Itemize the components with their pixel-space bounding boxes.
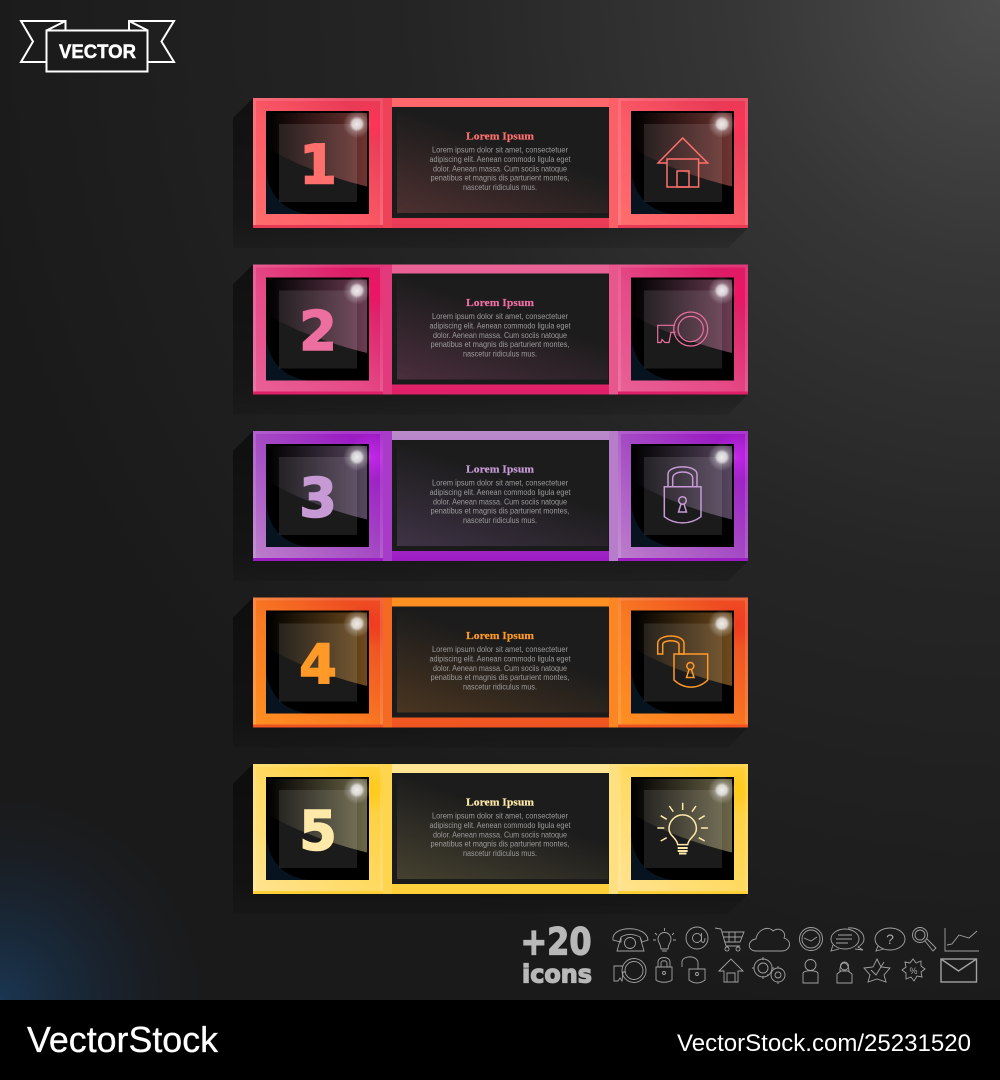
icon: discount badge <box>902 959 925 981</box>
number cell 5: 5 <box>299 800 337 862</box>
number cell 4: 4 <box>299 633 337 696</box>
text panel 5: Lorem Ipsum <box>466 796 534 808</box>
icon: question bubble <box>875 928 905 951</box>
text panel 4 <box>383 598 618 728</box>
number cell 1: 1 <box>299 134 337 196</box>
text panel 3: Lorem Ipsum <box>466 464 534 476</box>
number cell 4 <box>253 598 395 728</box>
icon: lock <box>656 958 672 982</box>
icon: envelope <box>941 959 976 982</box>
icon: at sign <box>686 927 708 949</box>
icon: speech bubbles <box>831 928 864 951</box>
number cell 5 <box>253 764 395 894</box>
icon cell 1: house <box>618 98 760 228</box>
icon: discount badge: % <box>909 966 918 976</box>
row 3 panel <box>233 431 760 581</box>
icon cell 5: light bulb <box>618 764 760 894</box>
badge: vector ribbon: VECTOR <box>59 41 136 63</box>
text panel 2 <box>383 264 618 394</box>
icon: question bubble: ? <box>886 931 894 947</box>
icon: clock <box>800 928 822 950</box>
icon: key <box>614 958 646 982</box>
number cell 1 <box>253 98 395 228</box>
promo: +20 icons label: +20 <box>520 920 592 964</box>
text panel 2: Lorem Ipsum <box>466 297 534 309</box>
icon: cart <box>715 928 744 951</box>
row 4 panel <box>233 598 760 748</box>
icon: cloud <box>749 928 790 951</box>
icon cell 2: key <box>618 264 760 394</box>
icon: man <box>803 960 818 983</box>
icon set: 20 outline icons <box>613 927 979 984</box>
footer bar <box>0 1000 1000 1080</box>
text panel 1: Lorem Ipsum <box>466 130 534 142</box>
number cell 3: 3 <box>299 466 337 530</box>
text panel 4: Lorem Ipsum <box>466 630 534 642</box>
icon: line chart <box>945 928 979 951</box>
icon: gears <box>752 957 785 984</box>
icon: telephone <box>613 929 648 951</box>
icon: home <box>719 959 743 982</box>
badge: vector ribbon <box>21 21 174 72</box>
icon cell 3: padlock <box>618 431 760 561</box>
row 5 panel <box>233 764 760 914</box>
icon cell 4: open padlock <box>618 598 760 728</box>
text panel 3 <box>383 431 618 561</box>
number cell 2: 2 <box>299 300 337 363</box>
number cell 2 <box>253 264 395 394</box>
text panel 5 <box>383 764 618 894</box>
icon: star check <box>864 959 890 982</box>
footer bar: VectorStock.com/25231520 <box>677 1030 971 1057</box>
text panel 1 <box>383 98 618 228</box>
promo: +20 icons label <box>520 920 592 988</box>
row 2 panel <box>233 264 760 414</box>
icon: magnifier <box>912 928 936 951</box>
promo: +20 icons label: icons <box>522 960 592 988</box>
icon: woman <box>837 962 852 983</box>
number cell 3 <box>253 431 395 561</box>
row 1 panel <box>233 98 760 248</box>
icon: bulb <box>653 928 676 951</box>
footer bar: VectorStock <box>27 1019 219 1060</box>
icon: open lock <box>682 957 705 983</box>
